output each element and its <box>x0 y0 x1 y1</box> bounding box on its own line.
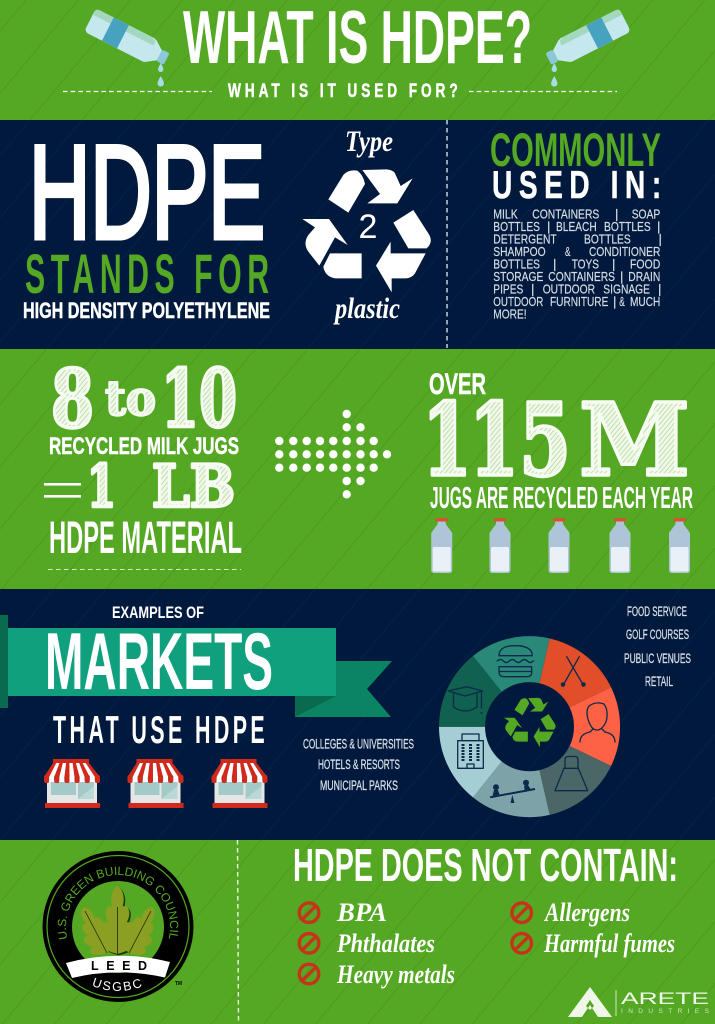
text: recycled milk jugs: RECYCLED MILK JUGS <box>49 433 239 460</box>
text: common uses list: MUCH <box>630 294 660 309</box>
text: HDPE material: HDPE MATERIAL <box>49 512 242 563</box>
list: allergens <box>512 898 630 927</box>
icon: LEED badge <box>42 851 194 1002</box>
subtitle: WHAT IS IT USED FOR? <box>228 80 458 102</box>
text: high density polyethylene: HIGH DENSITY POLYETHYLENE <box>23 298 270 323</box>
text: common uses list: CONTAINERS <box>532 206 600 221</box>
stat: equals 1 LB: 1 <box>87 452 116 520</box>
panel: does not contain <box>0 839 715 1024</box>
stat: 8 to 10: 10 <box>161 352 237 446</box>
ribbon banner <box>0 615 392 717</box>
text: common uses list: BOTTLES <box>604 219 651 234</box>
icon: green recycling symbol <box>504 698 556 747</box>
segment: golf courses <box>539 638 611 707</box>
text: common uses list: FURNITURE <box>550 294 609 309</box>
list: heavy metals: Heavy metals <box>336 960 455 989</box>
icon: recycling symbol <box>302 169 431 292</box>
heading: that use HDPE: THAT USE HDPE <box>53 708 265 752</box>
text: common uses list: SIGNAGE <box>603 281 650 296</box>
text: common uses list: & <box>565 244 571 259</box>
text: common uses list: | <box>612 256 615 271</box>
stat: 8 to 10: to <box>105 371 156 427</box>
list: harmful fumes <box>512 929 675 958</box>
segment: hotels and resorts <box>439 727 502 797</box>
text: common uses list: SHAMPOO <box>493 244 546 259</box>
segment: colleges and universities <box>439 656 502 727</box>
icon: storefronts <box>44 759 268 808</box>
text: markets list right: RETAIL <box>645 674 673 689</box>
text: common uses list: | <box>658 231 662 246</box>
text: common uses list: BOTTLES <box>493 219 540 234</box>
chart: market wheel <box>439 636 620 817</box>
list: phthalates <box>299 929 435 958</box>
list: BPA: BPA <box>336 898 387 927</box>
text: common uses list: MORE! <box>493 306 527 321</box>
stat: 115M <box>422 381 690 499</box>
stat: 115M: 5 <box>519 381 571 499</box>
text: common uses list: DRAIN <box>628 269 660 284</box>
segment: retail <box>539 746 611 815</box>
text: common uses list: PIPES <box>493 281 524 296</box>
text: common uses list: | <box>657 219 660 234</box>
text: common uses list: | <box>531 281 534 296</box>
text: markets list left: MUNICIPAL PARKS <box>320 778 398 793</box>
text: common uses list: STORAGE <box>493 269 544 284</box>
text: common uses list: CONTAINERS <box>548 269 615 284</box>
segment: public venues <box>570 687 620 766</box>
text: common uses list: OUTDOOR <box>493 294 543 309</box>
stat: 8 to 10: 8 <box>51 352 94 446</box>
text: common uses list: BOTTLES <box>493 256 540 271</box>
stat: equals 1 LB <box>44 452 235 520</box>
text: badge ring: U.S. GREEN BUILDING COUNCIL <box>58 866 178 940</box>
panel: recycling statistics <box>0 349 715 589</box>
heading: stands for: STANDS FOR <box>25 242 269 305</box>
text: common uses list: | <box>547 219 550 234</box>
text: common uses list: BLEACH <box>556 219 597 234</box>
list: harmful fumes: Harmful fumes <box>543 929 675 958</box>
text: markets list left: HOTELS & RESORTS <box>318 757 400 772</box>
icon: dotted arrow <box>275 410 391 498</box>
text: common uses list: | <box>553 256 556 271</box>
text: USGBC: USGBC <box>93 978 142 991</box>
heading: markets: MARKETS <box>45 617 273 707</box>
text: common uses list: MILK <box>493 206 518 221</box>
text: common uses list: SOAP <box>632 206 660 221</box>
text: common uses list: TOYS <box>572 256 599 271</box>
heading: used in: USED IN: <box>492 164 661 207</box>
list: heavy metals <box>299 960 455 989</box>
text: common uses list: FOOD <box>630 256 660 271</box>
text: trademark: TM <box>175 981 182 987</box>
stat: 115M: 1 <box>422 381 472 499</box>
heading: HDPE: HDPE <box>29 119 265 267</box>
panel: header <box>0 0 715 120</box>
list: phthalates: Phthalates <box>336 929 435 958</box>
text: common uses list: CONDITIONER <box>589 244 660 259</box>
text: common uses list: OUTDOOR <box>543 281 595 296</box>
text: common uses list: DETERGENT <box>493 231 557 246</box>
stat: equals 1 LB: LB <box>152 452 235 520</box>
text: plastic: plastic <box>333 292 400 325</box>
text: LEED: LEED <box>91 959 147 973</box>
text: common uses list <box>493 206 662 321</box>
text: common uses list: & <box>619 294 625 309</box>
panel: what HDPE stands for <box>0 119 715 349</box>
segment: food service <box>473 636 550 692</box>
text: common uses list: BOTTLES <box>584 231 631 246</box>
panel: markets <box>0 589 715 840</box>
text: type: Type <box>345 125 393 158</box>
text: markets list right <box>624 604 691 689</box>
text: markets list left <box>303 736 414 793</box>
text: over: OVER <box>429 368 486 401</box>
text: markets list left: COLLEGES & UNIVERSITIES <box>303 736 414 752</box>
logo: Arete Industries: INDUSTRIES <box>621 1008 710 1015</box>
icon: right pouring bottle <box>542 8 631 86</box>
icon: milk jugs row <box>431 518 690 573</box>
text: common uses list: | <box>620 269 623 284</box>
text: examples of: EXAMPLES OF <box>112 603 204 622</box>
text: common uses list: | <box>615 206 618 221</box>
stat: 8 to 10 <box>51 352 237 446</box>
list: BPA <box>299 898 387 927</box>
icon: left pouring bottle <box>84 8 173 86</box>
list: allergens: Allergens <box>543 898 630 927</box>
segment: municipal parks <box>473 762 550 817</box>
logo: Arete Industries: ARETE <box>621 989 709 1008</box>
logo: Arete Industries <box>568 987 710 1017</box>
text: common uses list: | <box>613 294 616 309</box>
stat: 115M: 1 <box>469 381 519 499</box>
stat: 115M: M <box>579 381 690 499</box>
text: number 2: 2 <box>359 208 377 246</box>
text: common uses list: | <box>658 281 661 296</box>
